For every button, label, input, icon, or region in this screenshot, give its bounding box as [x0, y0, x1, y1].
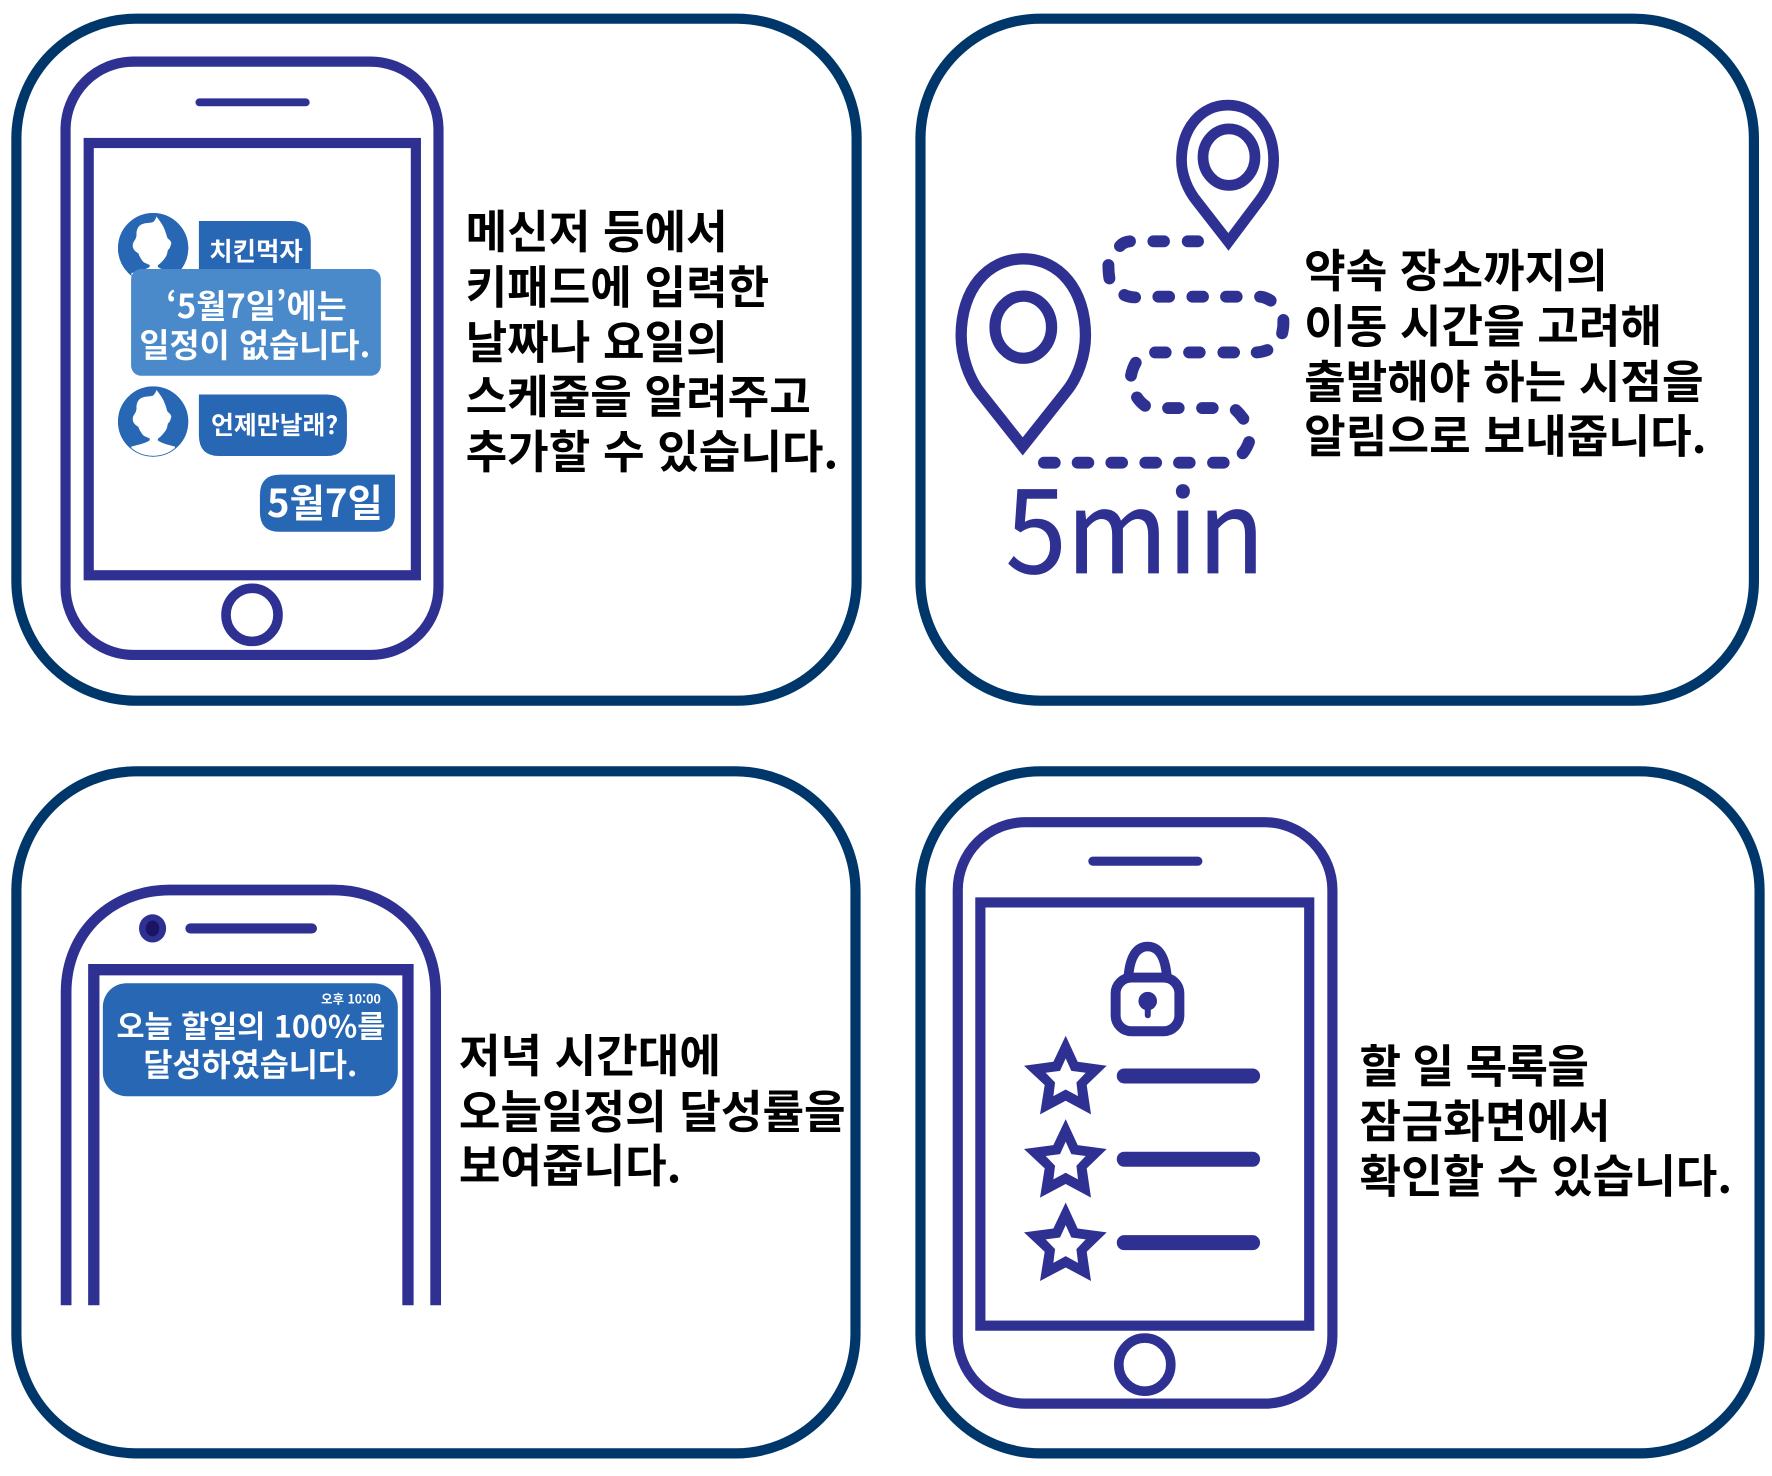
- description text top right: 출발해야 하는 시점을: [1304, 347, 1704, 412]
- description text bottom left: [459, 1021, 846, 1196]
- description text bottom left: 오늘일정의 달성률을: [459, 1077, 846, 1142]
- panel frame top right: [920, 19, 1754, 701]
- description text top right: 알림으로 보내줍니다.: [1304, 402, 1706, 467]
- notification card: 오후 10:00: [321, 990, 381, 1008]
- description text top left: 스케줄을 알려주고: [466, 362, 811, 427]
- chat bubble: when shall we meet: [199, 394, 347, 456]
- panel frame top left: [16, 19, 857, 701]
- notification card: 달성하였습니다.: [143, 1040, 357, 1086]
- description text top left: 메신저 등에서: [466, 197, 728, 262]
- icon: phone top with notification: [66, 890, 436, 1305]
- description text bottom right: 확인할 수 있습니다.: [1360, 1141, 1732, 1206]
- reply bubble: no schedule on May 7: ‘5월7일’에는: [166, 281, 347, 328]
- notification card: 오늘 할일의 100%를: [116, 1002, 385, 1046]
- notification card: [103, 983, 398, 1096]
- panel: messenger schedule: [16, 19, 857, 701]
- reply bubble: no schedule on May 7: [131, 269, 381, 376]
- chat bubble: chicken: 치킨먹자: [209, 233, 303, 269]
- description text bottom right: 잠금화면에서: [1360, 1086, 1610, 1151]
- description text top left: 키패드에 입력한: [466, 252, 769, 317]
- icon: destination map pin: [1182, 105, 1274, 242]
- description text bottom right: 할 일 목록을: [1360, 1032, 1589, 1097]
- icon: star and line row 3: [1024, 1202, 1260, 1281]
- description text top right: 약속 장소까지의: [1304, 236, 1608, 301]
- description text top left: [466, 197, 838, 482]
- panel: daily achievement: [16, 771, 855, 1453]
- description text top left: 날짜나 요일의: [466, 307, 728, 372]
- panel: lock screen to-do: [920, 771, 1760, 1453]
- description text top right: [1304, 236, 1706, 467]
- description text bottom right: [1360, 1032, 1732, 1206]
- icon: phone with chat: [66, 62, 438, 655]
- avatar: first user: [118, 213, 188, 276]
- label: 5min: 5min: [1006, 441, 1265, 606]
- panel: travel time alert: [920, 19, 1754, 701]
- panel frame bottom left: [16, 771, 855, 1453]
- icon: phone with lock screen: [958, 822, 1332, 1404]
- chat bubble: when shall we meet: 언제만날래?: [211, 406, 338, 442]
- panel frame bottom right: [920, 771, 1760, 1453]
- description text bottom left: 저녁 시간대에: [459, 1021, 721, 1086]
- icon: start map pin: [961, 259, 1085, 446]
- chat bubble: May 7: 5월7일: [267, 473, 383, 529]
- icon: padlock: [1116, 947, 1179, 1031]
- chat bubble: chicken: [199, 221, 311, 277]
- avatar: second user: [118, 387, 188, 462]
- dashed route: [1044, 241, 1283, 463]
- icon: star and line row 2: [1024, 1119, 1260, 1198]
- description text top right: 이동 시간을 고려해: [1304, 291, 1662, 356]
- description text bottom left: 보여줍니다.: [459, 1131, 681, 1196]
- icon: star and line row 1: [1024, 1036, 1260, 1114]
- description text top left: 추가할 수 있습니다.: [466, 417, 838, 482]
- reply bubble: no schedule on May 7: 일정이 없습니다.: [139, 320, 370, 367]
